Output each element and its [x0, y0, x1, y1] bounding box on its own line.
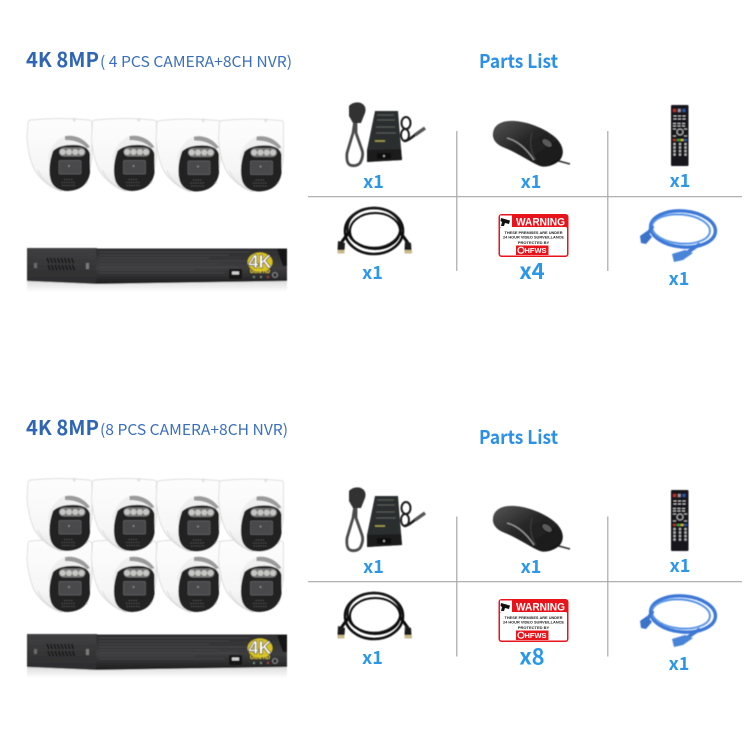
part: mouse	[493, 121, 570, 167]
quantity labels: first parts table	[362, 167, 690, 291]
recorder: second kit NVR	[27, 634, 287, 678]
cameras: first kit, four dome cameras	[27, 118, 284, 192]
quantity labels: first parts table: x1	[363, 168, 384, 194]
quantity labels: second parts table: x1	[521, 553, 541, 579]
quantity labels: second parts table: x8	[519, 640, 545, 672]
quantity labels: first parts table: x4	[519, 254, 545, 286]
part: warning sticker: 24 HOUR VIDEO SURVEILLANCE	[503, 234, 564, 240]
quantity labels: first parts table: x1	[362, 259, 383, 285]
quantity labels: second parts table: x1	[670, 552, 690, 578]
grid lines: first parts table	[308, 131, 742, 271]
heading: first kit title	[26, 43, 292, 73]
part: warning sticker: PROTECTED BY	[518, 240, 549, 245]
badge: 4K Ultra HD: 4K	[248, 252, 272, 272]
badge: 4K Ultra HD: Ultra HD	[250, 269, 270, 275]
part: mouse	[493, 506, 570, 552]
quantity labels: first parts table: x1	[669, 265, 689, 291]
heading: second parts list: Parts List	[479, 423, 558, 450]
part: warning sticker: HFWS	[524, 631, 547, 640]
part: warning sticker	[498, 599, 568, 642]
quantity labels: second parts table	[362, 552, 690, 676]
badge: 4K Ultra HD: Ultra HD	[250, 655, 270, 661]
part: warning sticker: WARNING	[516, 602, 565, 614]
heading: first kit title: ( 4 PCS CAMERA+8CH NVR)	[100, 51, 292, 72]
part: warning sticker: 24 HOUR VIDEO SURVEILLANCE	[503, 620, 564, 624]
quantity labels: second parts table: x1	[362, 644, 383, 670]
heading: second kit title	[26, 411, 288, 441]
part: remote control	[671, 105, 688, 166]
part: warning sticker: WARNING	[516, 216, 565, 228]
quantity labels: second parts table: x1	[669, 650, 689, 676]
part: network cable	[640, 593, 717, 647]
grid lines: second parts table	[308, 516, 742, 656]
quantity labels: second parts table: x1	[363, 553, 384, 579]
heading: first parts list: Parts List	[479, 47, 558, 74]
heading: first kit title: 4K 8MP	[26, 43, 99, 73]
part: remote control	[671, 490, 688, 551]
part: power adapter	[347, 102, 425, 166]
part: HDMI cable	[338, 208, 412, 254]
part: HDMI cable	[338, 593, 412, 639]
part: warning sticker	[498, 214, 568, 257]
part: warning sticker: PROTECTED BY	[518, 625, 549, 630]
quantity labels: first parts table: x1	[521, 168, 541, 194]
part: power adapter	[347, 487, 425, 551]
heading: second kit title: 4K 8MP	[26, 411, 99, 441]
badge: 4K Ultra HD: 4K	[248, 638, 272, 658]
recorder: first kit NVR	[27, 248, 287, 292]
part: warning sticker: HFWS	[524, 246, 547, 255]
part: network cable	[640, 208, 717, 262]
heading: second kit title: (8 PCS CAMERA+8CH NVR)	[100, 419, 288, 440]
part: warning sticker: THESE PREMISES ARE UNDER	[504, 230, 563, 235]
cameras: second kit, eight dome cameras	[27, 478, 284, 612]
part: warning sticker: THESE PREMISES ARE UNDER	[504, 615, 563, 620]
quantity labels: first parts table: x1	[670, 167, 690, 193]
